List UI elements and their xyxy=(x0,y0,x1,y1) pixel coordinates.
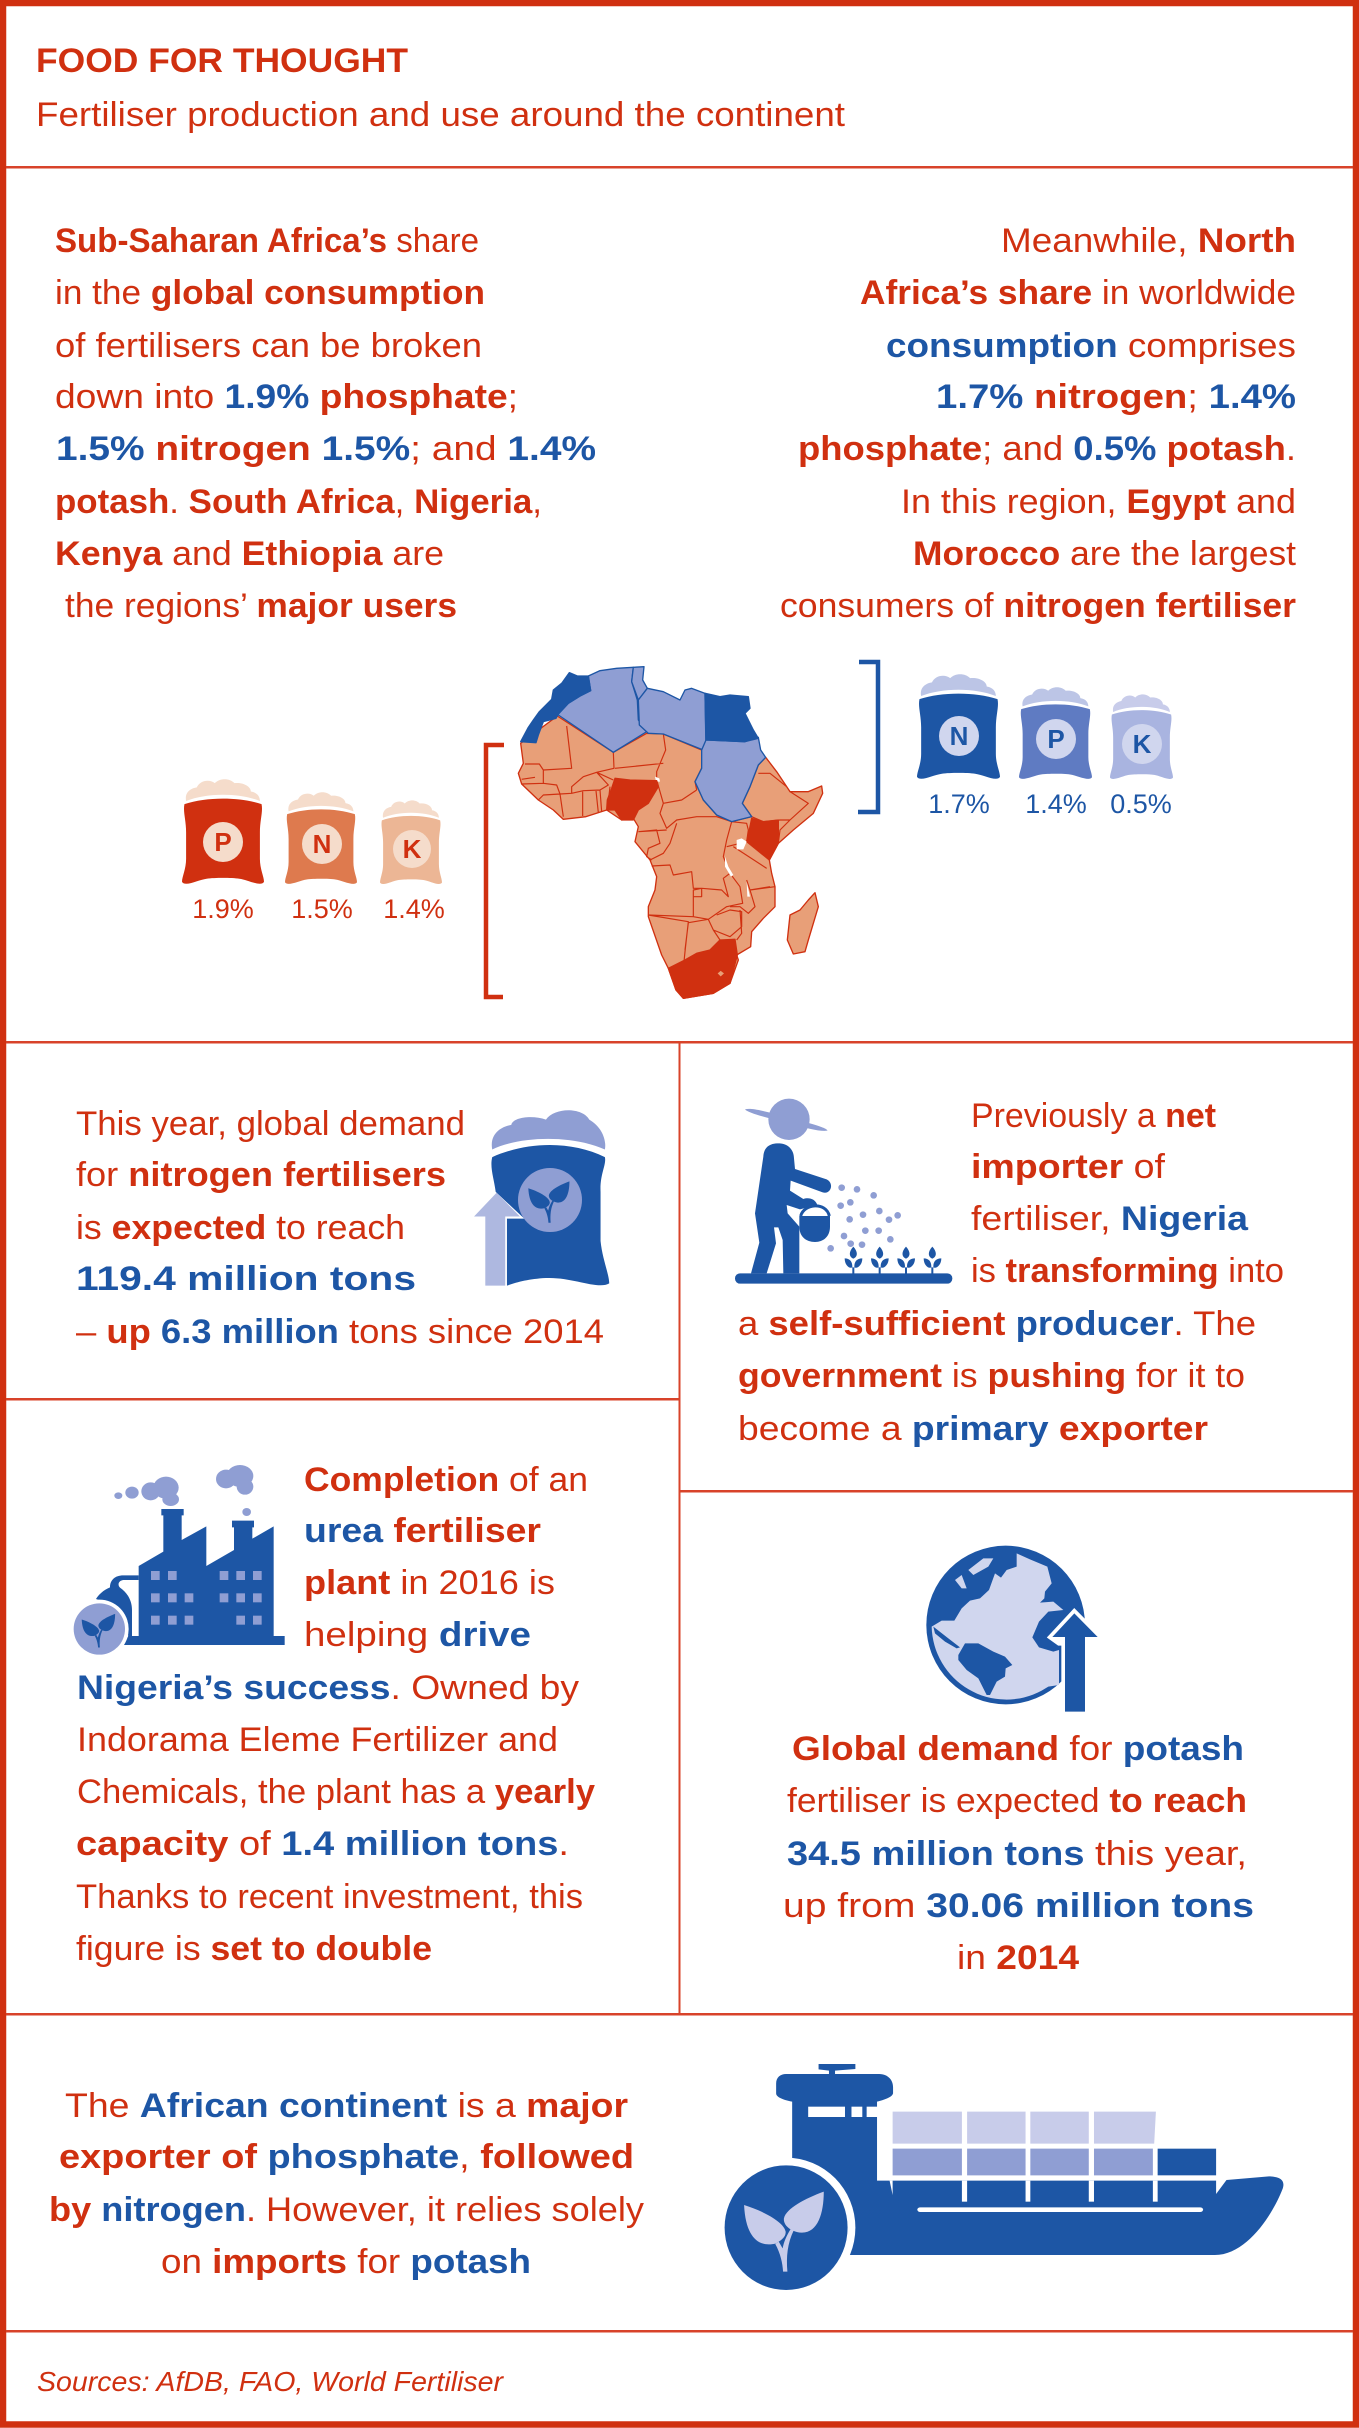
panel: potash demand text xyxy=(783,1730,1254,1977)
panel: potash demand text: Global demand for potash xyxy=(792,1730,1244,1768)
panel: potash demand text: fertiliser is expected to reach xyxy=(787,1782,1247,1820)
panel: Nigeria net importer text: is transforming into xyxy=(971,1252,1284,1290)
title: FOOD FOR THOUGHT xyxy=(36,42,408,80)
icon: P sack 1.4%: P xyxy=(1047,724,1065,754)
panel: nitrogen demand text: – up 6.3 million tons since 2014 xyxy=(76,1313,604,1351)
icon: N sack 1.7%: N xyxy=(950,721,968,751)
panel: urea plant text: Chemicals, the plant has a yearly xyxy=(77,1773,595,1811)
icon: nitrogen sack with arrow xyxy=(474,1110,609,1286)
country: Egypt xyxy=(705,693,758,742)
text block: North Africa: In this region, Egypt and xyxy=(901,483,1296,521)
panel: Nigeria net importer text xyxy=(738,1097,1284,1448)
icon: K sack 1.4%: 1.4% xyxy=(383,894,445,924)
icon: K sack 0.5%: K xyxy=(1133,729,1152,759)
country: Morocco and Western Sahara xyxy=(521,673,591,743)
icon: N sack 1.5%: N xyxy=(313,829,331,859)
panel: potash demand text: in 2014 xyxy=(957,1939,1079,1977)
text block: sub-Saharan Africa: Sub-Saharan Africa’s share xyxy=(55,222,479,260)
icon: container ship xyxy=(717,2064,1283,2298)
panel: nitrogen demand text: This year, global demand xyxy=(76,1105,465,1143)
icon: K sack 0.5% xyxy=(1110,694,1173,819)
lake Victoria xyxy=(737,838,747,849)
panel: urea plant text: Thanks to recent investment, this xyxy=(76,1878,583,1916)
panel: exporter text: by nitrogen . However, it relies solely xyxy=(49,2191,644,2229)
panel: Nigeria net importer text: government is pushing for it to xyxy=(738,1357,1245,1395)
panel: Nigeria net importer text: a self-sufficient producer . The xyxy=(738,1305,1256,1343)
text block: sub-Saharan Africa: down into 1.9% phosphate ; xyxy=(55,378,518,416)
icon: N sack 1.7%: 1.7% xyxy=(928,789,990,819)
text block: sub-Saharan Africa: in the global consumption xyxy=(55,274,485,312)
text block: North Africa: consumption comprises xyxy=(886,327,1296,365)
icon: K sack 1.4% xyxy=(380,800,445,924)
icon: P sack 1.4%: 1.4% xyxy=(1025,789,1087,819)
text block: sub-Saharan Africa: potash. South Africa, Nigeria, xyxy=(55,483,542,521)
country: South Africa xyxy=(668,939,737,998)
panel: urea plant text: Indorama Eleme Fertilizer and xyxy=(77,1721,558,1759)
icon: N sack 1.5% xyxy=(285,792,357,924)
panel: nitrogen demand text: for nitrogen fertilisers xyxy=(76,1156,446,1194)
red sub-Saharan sacks xyxy=(182,779,445,924)
text block: North Africa: Meanwhile, North xyxy=(1001,222,1296,260)
text block: North Africa: Africa’s share in worldwide xyxy=(860,274,1296,312)
panel: urea plant text: Nigeria’s success . Owned by xyxy=(77,1669,579,1707)
panel: nitrogen demand text: 119.4 million tons xyxy=(76,1260,416,1298)
panel: exporter text: on imports for potash xyxy=(161,2243,531,2281)
country: Kenya xyxy=(747,818,778,860)
region: North Africa xyxy=(521,667,766,822)
text block: North Africa: phosphate ; and 0.5% potash. xyxy=(798,430,1296,468)
panel: urea plant text xyxy=(76,1461,595,1968)
icon: K sack 0.5%: 0.5% xyxy=(1110,789,1172,819)
map: Africa xyxy=(518,667,823,998)
text block: sub-Saharan Africa: 1.5% nitrogen 1.5% ; and 1.4% xyxy=(56,430,596,468)
panel: exporter text: exporter of phosphate , followed xyxy=(59,2138,634,2176)
panel: Nigeria net importer text: fertiliser, Nigeria xyxy=(971,1200,1249,1238)
panel: urea plant text: Completion of an xyxy=(304,1461,588,1499)
icon: P sack 1.9% xyxy=(182,779,264,924)
panel: potash demand text: 34.5 million tons this year, xyxy=(787,1835,1247,1873)
text block: North Africa xyxy=(780,222,1297,625)
text block: North Africa: Morocco are the largest xyxy=(913,535,1297,573)
blue North Africa sacks xyxy=(917,674,1173,819)
icon: factory xyxy=(70,1465,285,1658)
text block: sub-Saharan Africa: of fertilisers can be broken xyxy=(55,327,482,365)
subtitle: Fertiliser production and use around the continent xyxy=(36,96,846,134)
icon: P sack 1.4% xyxy=(1019,687,1092,819)
panel: urea plant text: figure is set to double xyxy=(76,1930,432,1968)
panel: Nigeria net importer text: become a primary exporter xyxy=(738,1410,1208,1448)
icon: N sack 1.7% xyxy=(917,674,1000,819)
icon: P sack 1.9%: 1.9% xyxy=(192,894,254,924)
panel: exporter text: The African continent is a major xyxy=(65,2087,628,2125)
bracket: North Africa xyxy=(858,662,878,812)
text block: sub-Saharan Africa: Kenya and Ethiopia are xyxy=(55,535,444,573)
text block: North Africa: 1.7% nitrogen ; 1.4% xyxy=(936,378,1296,416)
text block: sub-Saharan Africa: the regions’ major users xyxy=(65,587,457,625)
sources: Sources: AfDB, FAO, World Fertiliser xyxy=(37,2366,505,2397)
panel: urea plant text: plant in 2016 is xyxy=(304,1564,555,1602)
panel: urea plant text: helping drive xyxy=(304,1616,531,1654)
bracket: sub-Saharan xyxy=(486,745,504,997)
icon: farmer spreading fertiliser xyxy=(735,1099,952,1284)
panel: exporter text xyxy=(49,2087,644,2281)
text block: sub-Saharan Africa xyxy=(55,222,596,625)
panel: urea plant text: urea fertiliser xyxy=(304,1512,541,1550)
country: Nigeria xyxy=(607,778,658,820)
panel: header xyxy=(36,42,846,134)
panel: Nigeria net importer text: Previously a net xyxy=(971,1097,1216,1135)
icon: P sack 1.9%: P xyxy=(214,827,232,857)
icon: globe with arrow xyxy=(926,1546,1098,1712)
icon: K sack 1.4%: K xyxy=(403,834,422,864)
panel: Nigeria net importer text: importer of xyxy=(971,1148,1166,1186)
icon: N sack 1.5%: 1.5% xyxy=(291,894,353,924)
panel: nitrogen demand text xyxy=(76,1105,604,1351)
panel: nitrogen demand text: is expected to reach xyxy=(76,1209,405,1247)
panel: urea plant text: capacity of 1.4 million tons . xyxy=(76,1825,569,1863)
text block: North Africa: consumers of nitrogen fertiliser xyxy=(780,587,1296,625)
panel: potash demand text: up from 30.06 million tons xyxy=(783,1887,1254,1925)
region: sub-Saharan Africa xyxy=(518,716,823,998)
